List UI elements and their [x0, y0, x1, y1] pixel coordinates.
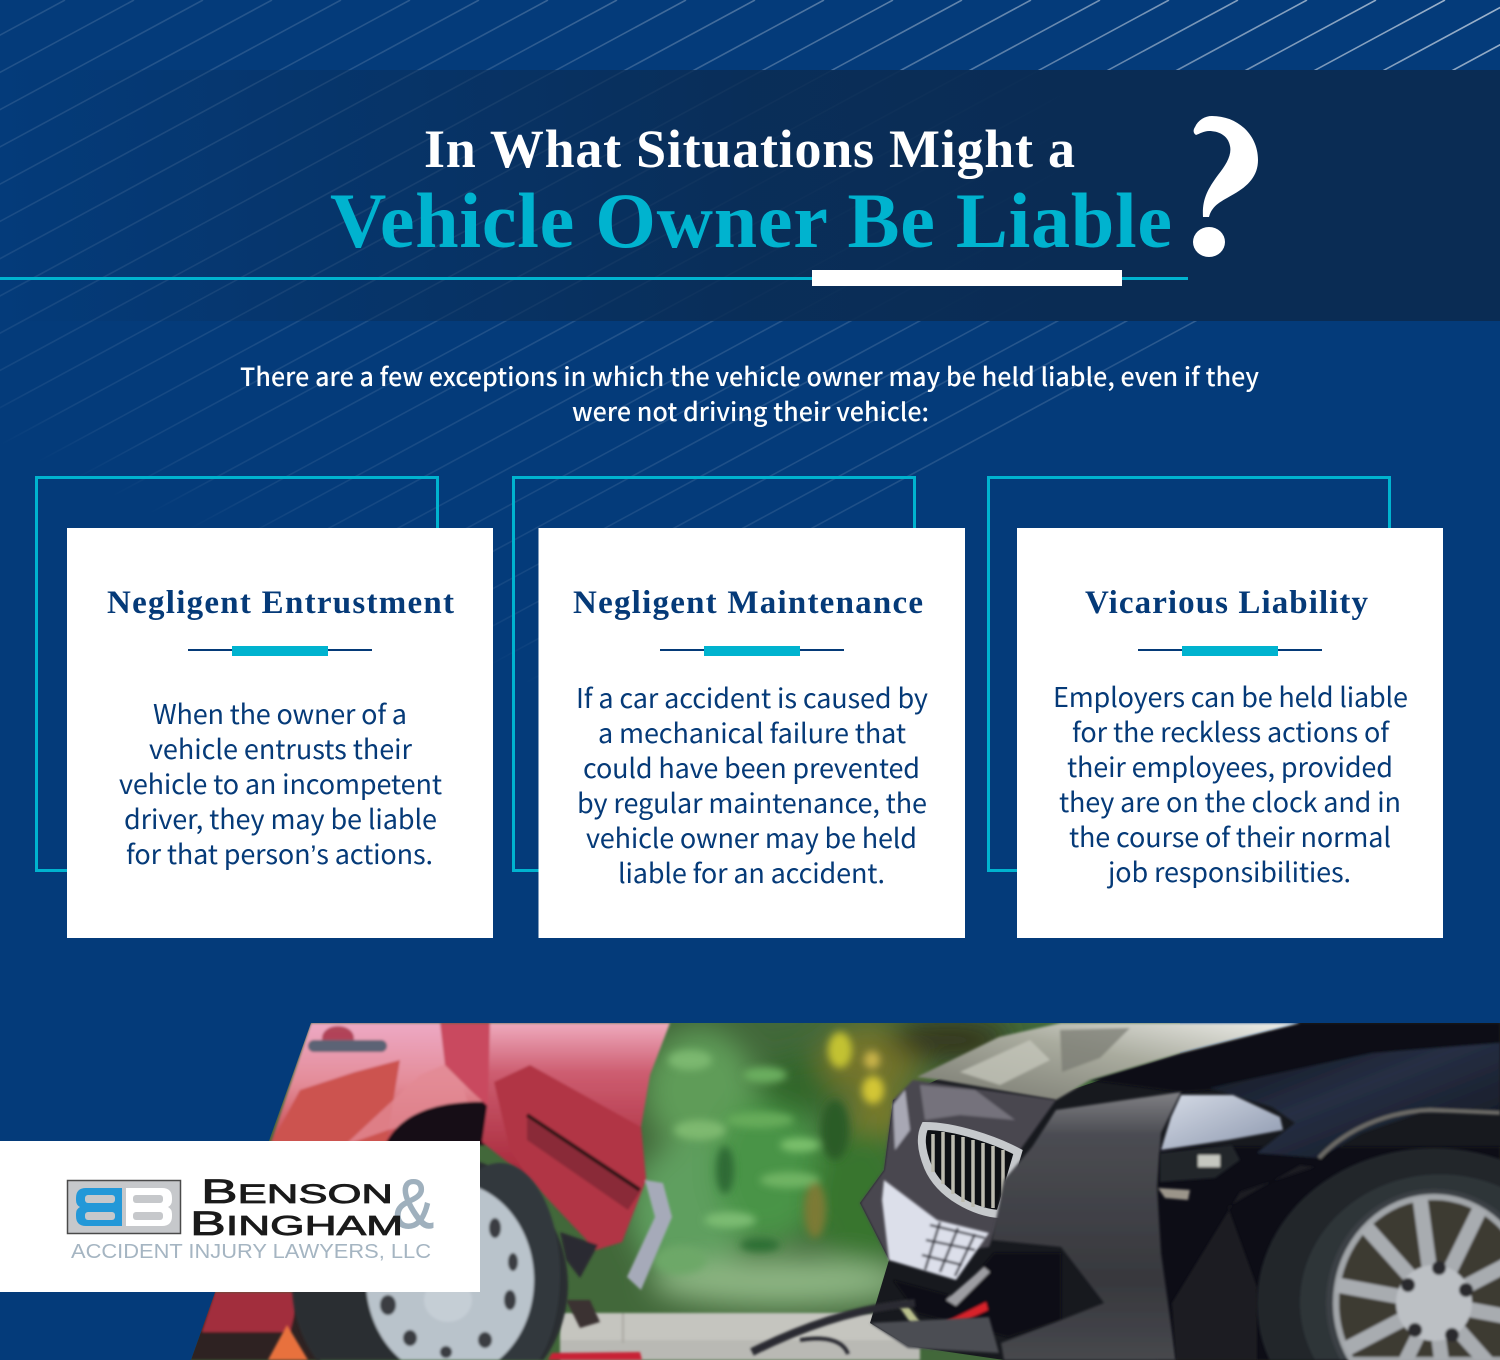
foliage background	[180, 1020, 1180, 1360]
body text: for the reckless actions of	[1072, 711, 1390, 750]
heading: Negligent Entrustment	[107, 585, 454, 621]
body text	[119, 693, 442, 872]
title: Vehicle Owner Be Liable	[330, 177, 1172, 264]
divider	[188, 646, 372, 656]
licence plate mount	[882, 1180, 989, 1280]
curb and road	[560, 1313, 920, 1360]
logo panel	[0, 1141, 480, 1292]
heading: Negligent Maintenance	[573, 585, 923, 621]
traffic cone and debris	[268, 1325, 642, 1360]
grille	[922, 1126, 1018, 1214]
front bumper corner	[992, 1092, 1181, 1360]
body text: vehicle owner may be held	[586, 817, 917, 856]
red car wheel	[292, 1153, 568, 1360]
body text: a mechanical failure that	[598, 712, 906, 751]
exposed engine opening	[893, 1253, 1061, 1337]
black car wheel well and fender	[1090, 1023, 1500, 1360]
intro text: There are a few exceptions in which the vehicle owner may be held liable, even if they	[240, 358, 1259, 394]
logo name: B INGHAM	[190, 1205, 403, 1243]
black car wheel	[1257, 1148, 1500, 1360]
divider	[1138, 646, 1322, 656]
body text: driver, they may be liable	[124, 798, 437, 837]
body text: liable for an accident.	[618, 852, 885, 891]
title: In What Situations Might a	[424, 119, 1075, 179]
body text: vehicle to an incompetent	[119, 763, 442, 802]
header rule	[0, 270, 1188, 286]
headlight	[1158, 1095, 1283, 1200]
title	[330, 119, 1172, 264]
body text: could have been prevented	[583, 747, 920, 786]
body text: by regular maintenance, the	[577, 782, 927, 821]
panel: vicarious liability	[988, 478, 1443, 938]
fender liner	[1172, 1165, 1315, 1360]
intro text: were not driving their vehicle:	[572, 393, 929, 429]
broken lower bumper	[752, 1303, 999, 1354]
logo name	[190, 1173, 403, 1243]
intro text	[240, 358, 1259, 429]
body text: vehicle entrusts their	[149, 728, 413, 767]
body text: When the owner of a	[153, 693, 407, 732]
black car base	[860, 1023, 1500, 1360]
header band	[0, 70, 1500, 321]
body text: job responsibilities.	[1106, 851, 1351, 890]
body text	[576, 677, 928, 891]
logo ampersand: &	[393, 1165, 434, 1243]
body text	[1053, 676, 1408, 890]
panel: negligent maintenance	[514, 478, 965, 938]
crumpled hood	[917, 1023, 1300, 1100]
logo tagline: ACCIDENT INJURY LAWYERS, LLC	[71, 1241, 431, 1263]
logo icon	[68, 1180, 180, 1234]
divider	[660, 646, 844, 656]
body text: for that person’s actions.	[126, 833, 433, 872]
body text: the course of their normal	[1069, 816, 1391, 855]
panel: negligent entrustment	[36, 478, 493, 938]
icon: question mark	[1193, 116, 1258, 257]
logo name: B ENSON	[201, 1173, 393, 1211]
body text: they are on the clock and in	[1059, 781, 1401, 820]
body text: their employees, provided	[1067, 746, 1393, 785]
heading: Vicarious Liability	[1085, 585, 1368, 621]
front fascia	[860, 1080, 1056, 1260]
red car	[180, 1023, 672, 1360]
photo: damaged cars	[180, 1020, 1500, 1360]
body text: Employers can be held liable	[1053, 676, 1408, 715]
background diagonal stripes	[0, 0, 1500, 702]
body text: If a car accident is caused by	[576, 677, 928, 716]
